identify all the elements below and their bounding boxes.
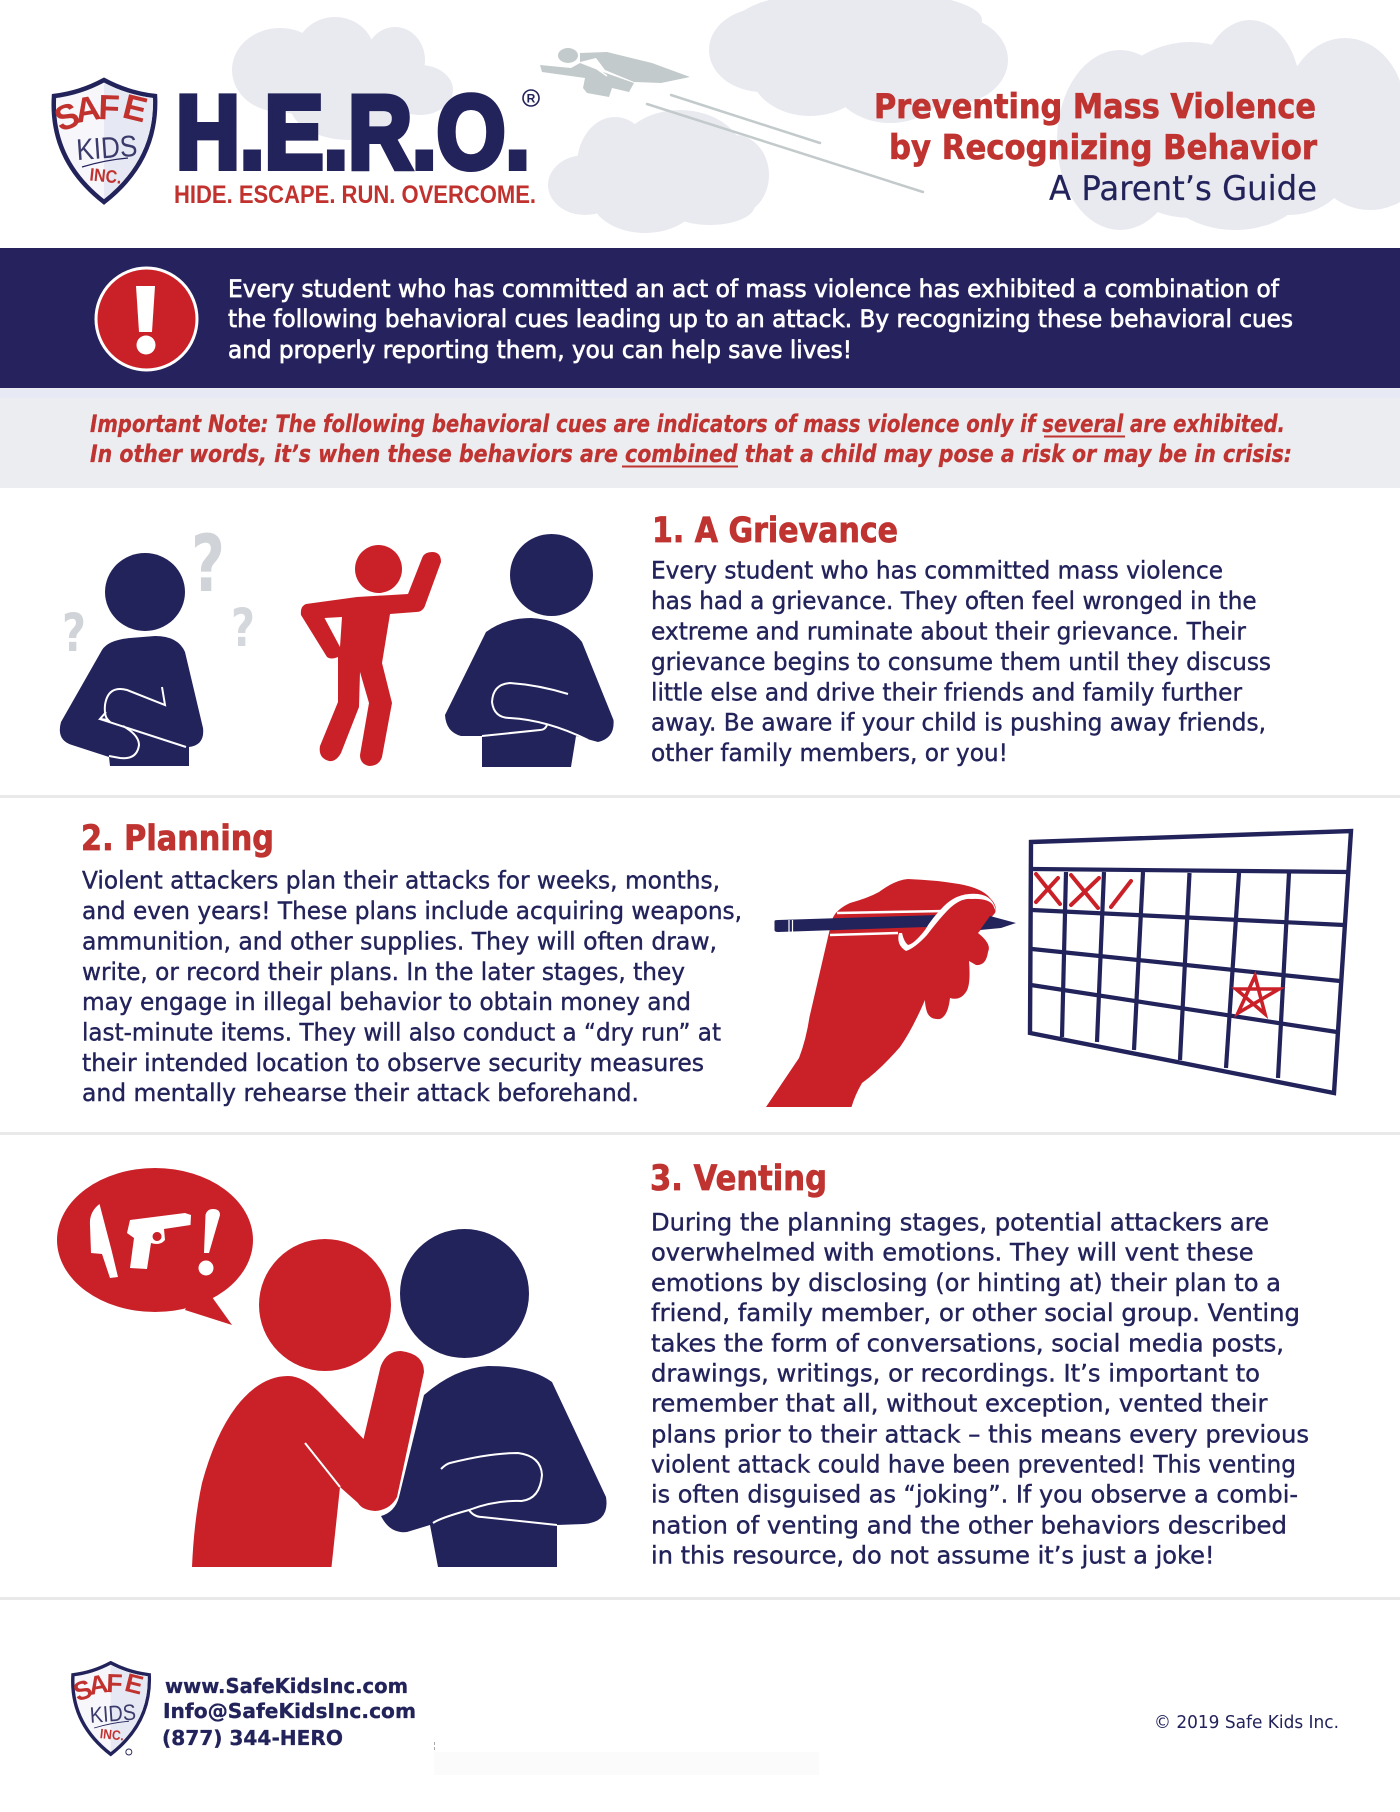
body text: plans prior to their attack – this means every previous bbox=[651, 1421, 1309, 1449]
footer contact details bbox=[162, 1674, 416, 1750]
red figure bbox=[192, 1239, 424, 1567]
title bbox=[874, 87, 1317, 209]
question marks: ? bbox=[62, 603, 86, 664]
alert text: Every student who has committed an act of mass violence has exhibited a combination of bbox=[228, 275, 1280, 303]
title: Preventing Mass Violence bbox=[874, 87, 1316, 127]
body text: and even years! These plans include acquiring weapons, bbox=[82, 897, 742, 925]
copyright: © 2019 Safe Kids Inc. bbox=[1154, 1712, 1339, 1733]
icon: flying superhero bbox=[540, 48, 690, 97]
panel: important note bbox=[0, 388, 1400, 488]
faint scan artifact bbox=[434, 1742, 819, 1775]
icon: hand holding pen bbox=[766, 879, 1016, 1107]
panel: 2. Planning illustration bbox=[766, 831, 1351, 1107]
body text bbox=[651, 1209, 1309, 1569]
logo: Safe Kids Inc shield bbox=[49, 80, 155, 202]
question marks: ? bbox=[231, 598, 255, 659]
panel: 2. Planning text bbox=[81, 819, 742, 1107]
footer logo: small shield: SAFE bbox=[69, 1667, 146, 1707]
logo wordmark: H.E.R.O.: H.E.R.O. bbox=[176, 75, 530, 191]
footer contact details: (877) 344-HERO bbox=[162, 1726, 343, 1750]
body text: emotions by disclosing (or hinting at) their plan to a bbox=[651, 1269, 1281, 1297]
body text: drawings, writings, or recordings. It’s important to bbox=[651, 1360, 1260, 1388]
question marks bbox=[62, 520, 255, 664]
speed lines bbox=[647, 95, 923, 192]
body text: grievance begins to consume them until they discuss bbox=[651, 648, 1271, 676]
icon: knife bbox=[90, 1204, 118, 1278]
panel: alert banner bbox=[0, 248, 1400, 388]
body text: remember that all, without exception, vented their bbox=[651, 1390, 1268, 1418]
panel: 1. A Grievance illustration bbox=[60, 520, 614, 767]
logo: Safe Kids Inc shield: SAFE bbox=[49, 87, 151, 140]
body text: away. Be aware if your child is pushing away friends, bbox=[651, 709, 1266, 737]
body text: last-minute items. They will also conduct a “dry run” at bbox=[82, 1019, 721, 1047]
heading: 1. A Grievance bbox=[652, 511, 898, 551]
panel: 3. Venting illustration bbox=[57, 1168, 607, 1567]
body text bbox=[651, 556, 1271, 767]
body text bbox=[82, 866, 742, 1107]
alert text: the following behavioral cues leading up to an attack. By recognizing these behavioral cues bbox=[228, 305, 1293, 333]
body text: is often disguised as “joking”. If you observe a combi- bbox=[651, 1481, 1298, 1509]
note text bbox=[90, 410, 1292, 468]
body text: overwhelmed with emotions. They will vent these bbox=[651, 1239, 1254, 1267]
footer contact details: Info@SafeKidsInc.com bbox=[163, 1699, 416, 1723]
body text: takes the form of conversations, social media posts, bbox=[651, 1330, 1284, 1358]
icon: calendar bbox=[1030, 831, 1351, 1093]
navy figure bbox=[381, 1229, 607, 1567]
body text: may engage in illegal behavior to obtain money and bbox=[82, 988, 691, 1016]
calendar marks bbox=[1036, 874, 1279, 1014]
alert text bbox=[228, 275, 1293, 364]
body text: has had a grievance. They often feel wronged in the bbox=[651, 587, 1257, 615]
icon: gun bbox=[127, 1213, 191, 1269]
background clouds bbox=[232, 0, 1400, 233]
icon: exclamation circle bbox=[96, 268, 197, 370]
footer logo: small shield bbox=[69, 1663, 149, 1755]
body text: During the planning stages, potential attackers are bbox=[651, 1209, 1269, 1237]
logo: Safe Kids Inc shield: KIDS bbox=[75, 130, 138, 167]
body text: their intended location to observe security measures bbox=[82, 1049, 704, 1077]
body text: friend, family member, or other social group. Venting bbox=[651, 1299, 1300, 1327]
footer contact details: www.SafeKidsInc.com bbox=[165, 1674, 408, 1698]
body text: other family members, or you! bbox=[651, 739, 1008, 767]
body text: extreme and ruminate about their grievance. Their bbox=[651, 617, 1246, 645]
registered mark: R bbox=[527, 92, 536, 106]
heading: 2. Planning bbox=[81, 819, 274, 859]
footer logo: small shield: KIDS bbox=[89, 1700, 137, 1728]
registered mark bbox=[523, 90, 539, 106]
body text: in this resource, do not assume it’s just a joke! bbox=[651, 1541, 1215, 1569]
body text: nation of venting and the other behaviors described bbox=[651, 1511, 1287, 1539]
icon: exclamation mark bbox=[198, 1209, 220, 1276]
body text: Every student who has committed mass violence bbox=[651, 556, 1223, 584]
alert text: and properly reporting them, you can help save lives! bbox=[228, 336, 852, 364]
red figure bbox=[301, 545, 441, 766]
body text: ammunition, and other supplies. They will often draw, bbox=[82, 927, 717, 955]
body text: Violent attackers plan their attacks for weeks, months, bbox=[82, 866, 720, 894]
right navy figure bbox=[445, 534, 614, 767]
body text: and mentally rehearse their attack beforehand. bbox=[82, 1079, 639, 1107]
body text: write, or record their plans. In the later stages, they bbox=[82, 958, 685, 986]
panel: 3. Venting text bbox=[650, 1159, 1309, 1569]
title: by Recognizing Behavior bbox=[889, 128, 1317, 168]
heading: 3. Venting bbox=[650, 1159, 827, 1199]
tagline: HIDE. ESCAPE. RUN. OVERCOME. bbox=[174, 181, 536, 209]
question marks: ? bbox=[191, 520, 225, 610]
panel: 1. A Grievance text bbox=[651, 511, 1271, 767]
left navy figure bbox=[60, 553, 203, 766]
body text: violent attack could have been prevented! This venting bbox=[651, 1451, 1296, 1479]
title: A Parent’s Guide bbox=[1049, 169, 1317, 209]
logo: Safe Kids Inc shield: INC. bbox=[89, 164, 123, 188]
footer logo: small shield: INC. bbox=[99, 1726, 125, 1743]
speech bubble bbox=[57, 1168, 253, 1325]
body text: little else and drive their friends and family further bbox=[651, 679, 1242, 707]
